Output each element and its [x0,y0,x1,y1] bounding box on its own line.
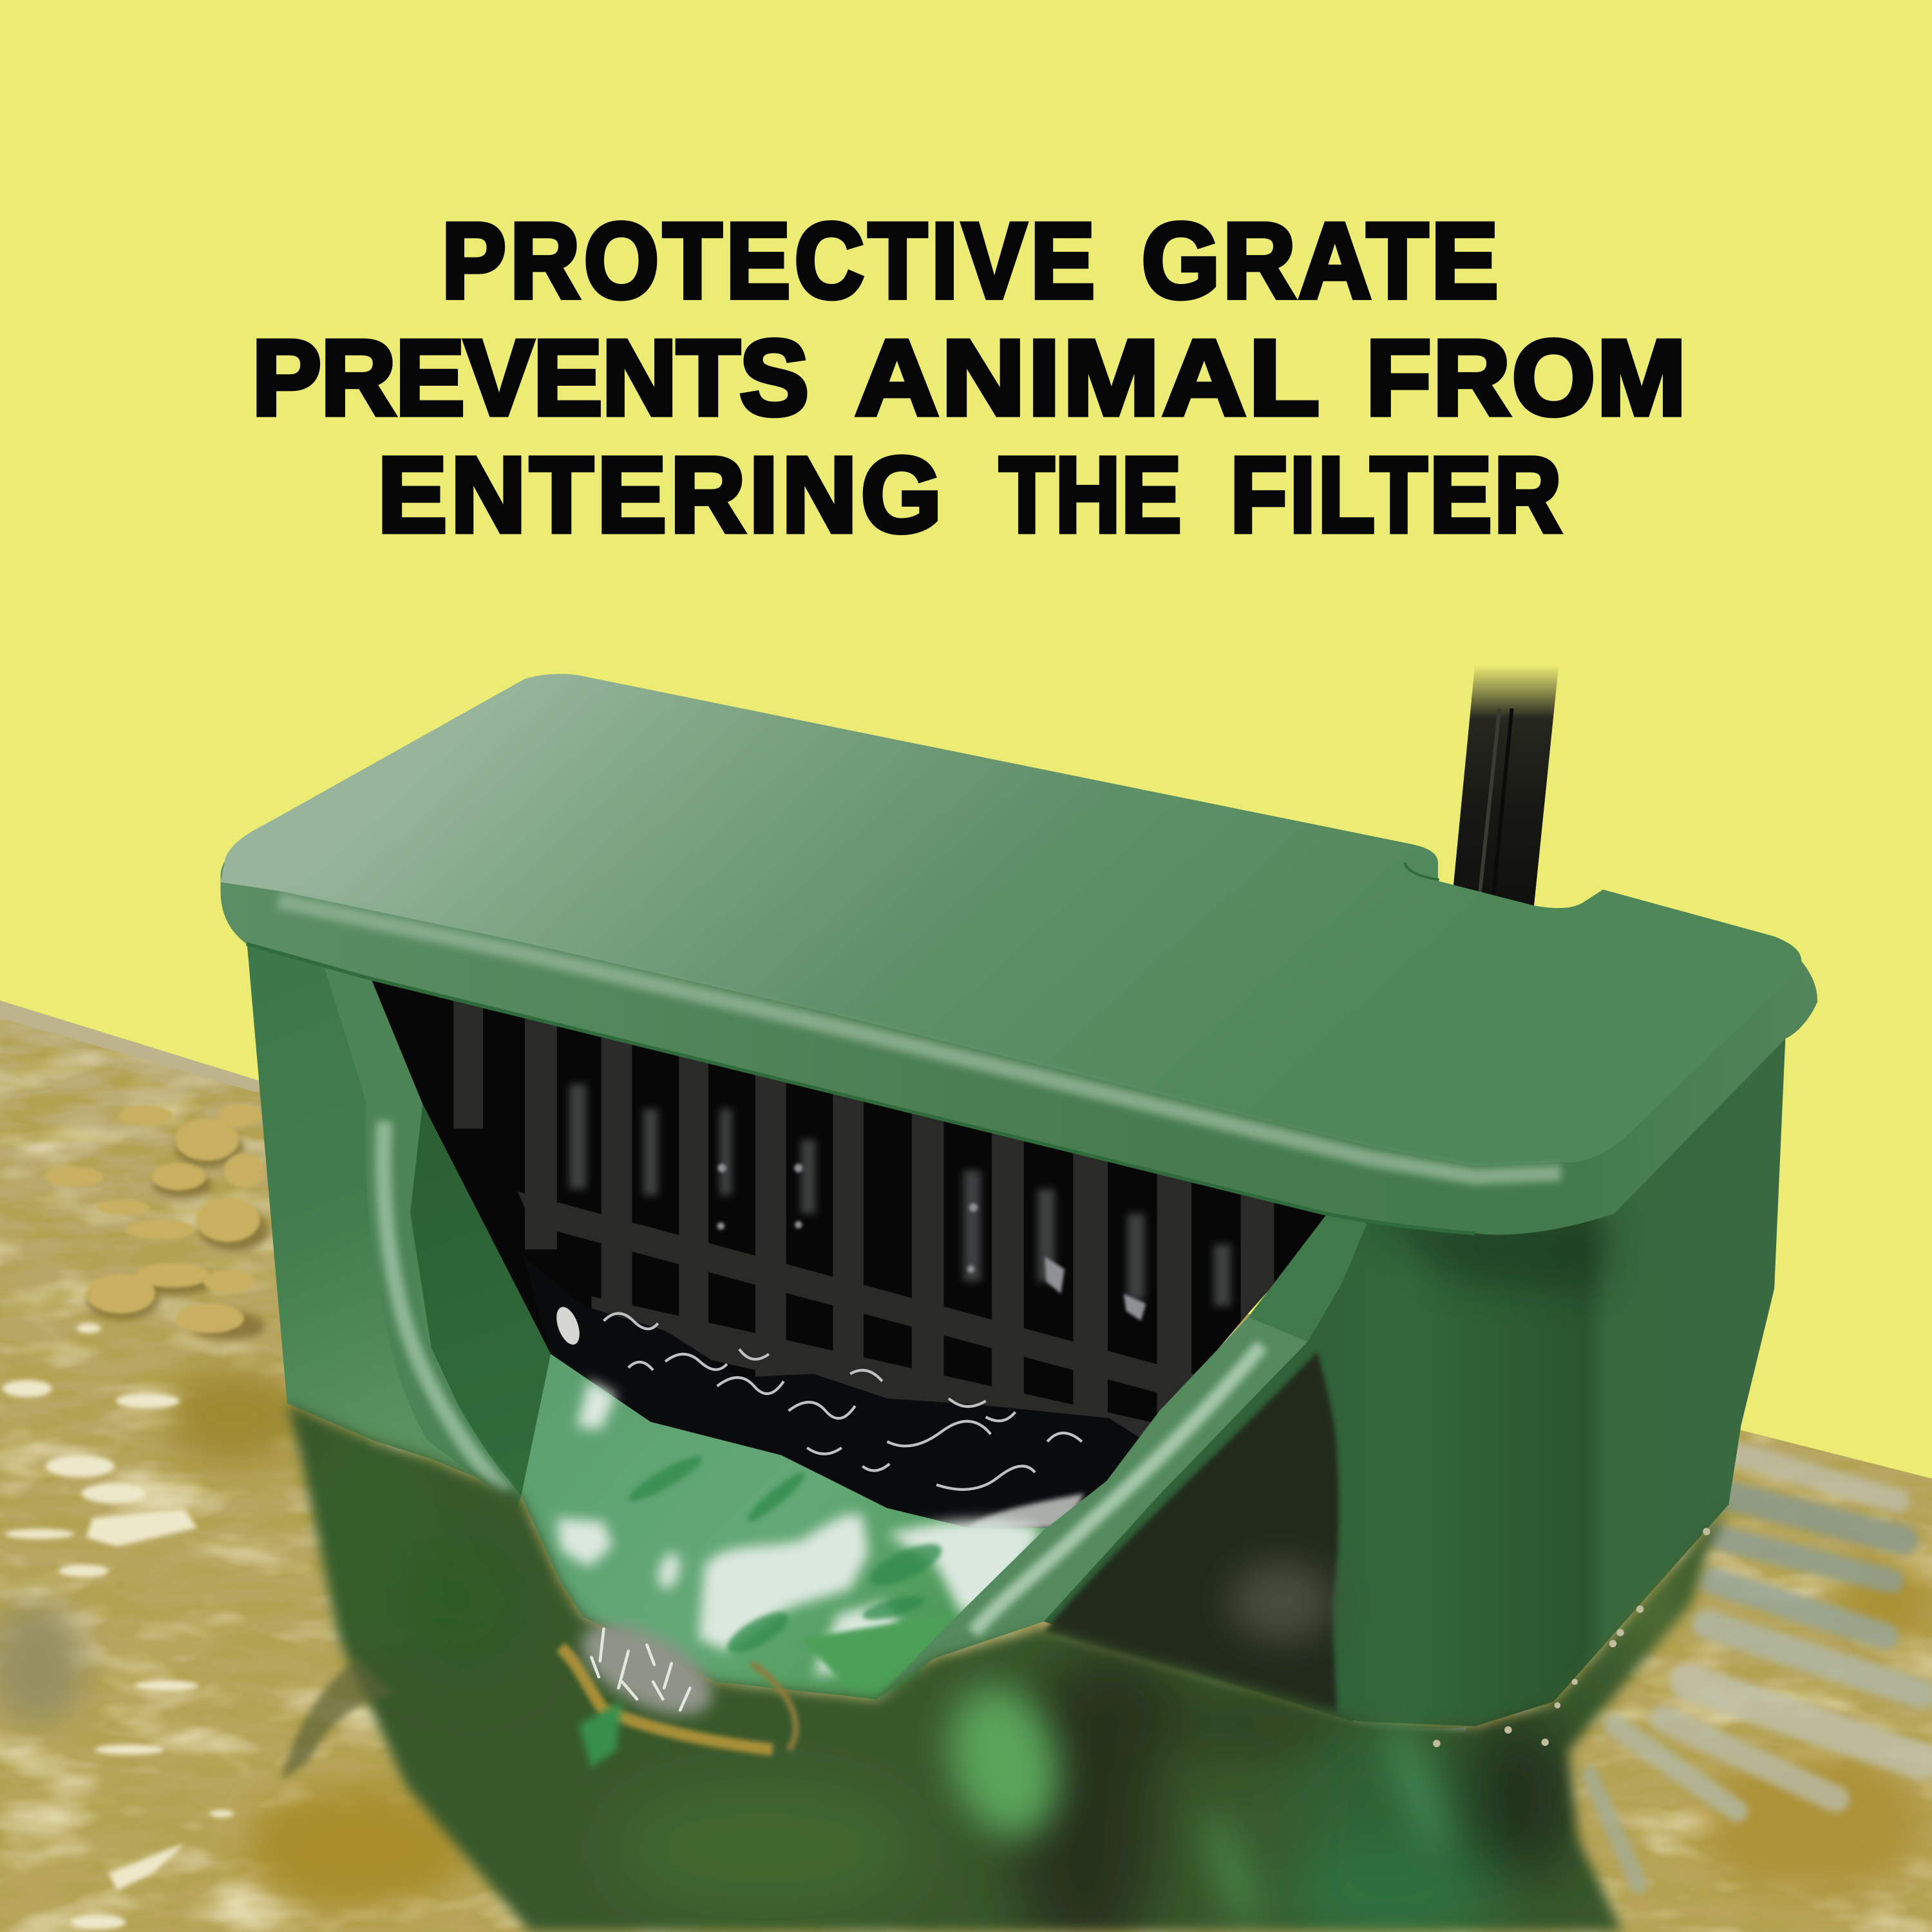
title [252,201,1686,555]
filter box body [247,936,1785,1731]
power cord [1452,665,1558,905]
shadow under the lid [1368,1214,1614,1294]
left flap of the intake [324,966,551,1508]
black media tumbling in the water [524,1257,1146,1528]
lid rim [220,674,1817,1235]
notch detail [1405,862,1439,880]
lid top face [220,674,1801,1166]
title: PREVENTS [252,318,809,437]
right flap of the intake [876,1214,1367,1699]
grate bars [453,1001,1274,1437]
title: FROM [1366,318,1686,438]
rim highlight [278,901,1561,1177]
title: ANIMAL [855,317,1320,437]
title: ENTERING [377,435,942,554]
ground: stream bed and water [0,986,1932,1932]
murky green water in front [271,1392,1750,1932]
lid [220,674,1817,1235]
grate panel [372,981,1325,1524]
title: FILTER [1230,435,1562,555]
fuzzy media behind slots [569,1084,1231,1306]
title: THE [999,435,1182,554]
dark water tendril [281,1657,394,1781]
splash with bubbles and gold pebbles [561,1605,796,1768]
title: PROTECTIVE [442,201,1095,321]
left side wall [247,936,551,1496]
shaded recess on right [1044,1352,1339,1715]
upper cross bar [518,1191,1257,1419]
lower cross bar [591,1296,1183,1466]
water cascade over the lip [521,1354,1063,1699]
right side wall [1044,1016,1785,1726]
title: GRATE [1142,202,1499,321]
droplets [1433,1528,1710,1747]
bright water line [1353,1723,1466,1731]
pale ripple streaks on the right [1589,1454,1922,1885]
